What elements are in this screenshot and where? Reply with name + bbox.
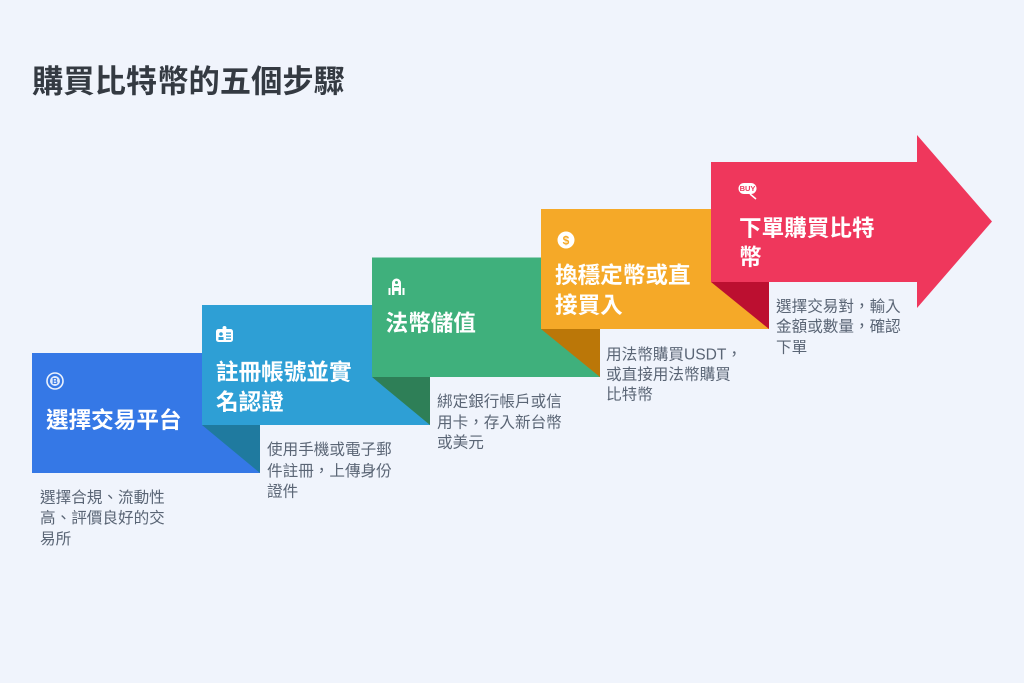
step 5 heading — [739, 216, 875, 270]
step 1 heading: 選擇交易平台 — [46, 407, 182, 433]
step 5 heading: 下單購買比特 — [739, 216, 875, 241]
step 5 description: 下單 — [776, 340, 807, 356]
step 4 fold — [541, 329, 600, 377]
step 1 description: 易所 — [40, 530, 71, 548]
step 2 heading — [216, 360, 352, 415]
step 4 heading: 換穩定幣或直 — [555, 263, 691, 288]
step 3 description: 或美元 — [437, 434, 484, 452]
step 3 description: 用卡，存入新台幣 — [437, 414, 562, 432]
step 1 description — [40, 488, 165, 548]
icon: buy cursor: BUY — [740, 184, 755, 193]
step 2 heading: 註冊帳號並實 — [216, 360, 352, 385]
icon: bitcoin coin: B — [52, 377, 58, 386]
step 2 description: 使用手機或電子郵 — [267, 440, 392, 458]
icon: id badge — [216, 326, 233, 342]
step 4 heading: 接買入 — [555, 293, 623, 318]
icon: dollar coin — [558, 232, 574, 248]
icon: bitcoin coin — [47, 373, 63, 389]
step 5 description — [776, 298, 901, 356]
step 1 panel: choose platform — [32, 353, 260, 473]
icon: buy cursor — [738, 183, 756, 199]
step 3 panel: fiat deposit — [372, 258, 600, 425]
step 2 description: 證件 — [267, 482, 298, 500]
step 5 description: 選擇交易對，輸入 — [776, 298, 901, 316]
step 4 description: 比特幣 — [606, 386, 653, 404]
step 4 panel: convert to stablecoin — [541, 209, 769, 377]
step 2 description: 件註冊，上傳身份 — [267, 462, 392, 480]
step 3 heading: 法幣儲值 — [386, 311, 476, 336]
step 2 heading: 名認證 — [216, 389, 284, 415]
step 4 heading — [555, 263, 691, 318]
step 5 arrow panel: place order — [711, 135, 992, 329]
step 4 description: 用法幣購買USDT， — [606, 346, 742, 364]
icon: dollar coin: $ — [563, 234, 570, 248]
step 3 description — [437, 392, 562, 452]
step 5 fold — [711, 282, 769, 329]
title: 購買比特幣的五個步驟 — [32, 64, 345, 99]
icon: bank building — [388, 278, 404, 295]
step 5 heading: 幣 — [739, 245, 762, 270]
step 1 description: 高、評價良好的交 — [40, 509, 165, 527]
step 4 description — [606, 346, 742, 404]
step 2 fold — [202, 425, 260, 473]
step 2 description — [267, 440, 392, 500]
step 3 fold — [372, 377, 430, 425]
step 5 description: 金額或數量，確認 — [776, 318, 901, 336]
step 3 description: 綁定銀行帳戶或信 — [437, 392, 562, 410]
step 1 description: 選擇合規、流動性 — [40, 488, 165, 506]
step 2 panel: register and verify — [202, 305, 430, 473]
step 4 description: 或直接用法幣購買 — [606, 366, 731, 384]
